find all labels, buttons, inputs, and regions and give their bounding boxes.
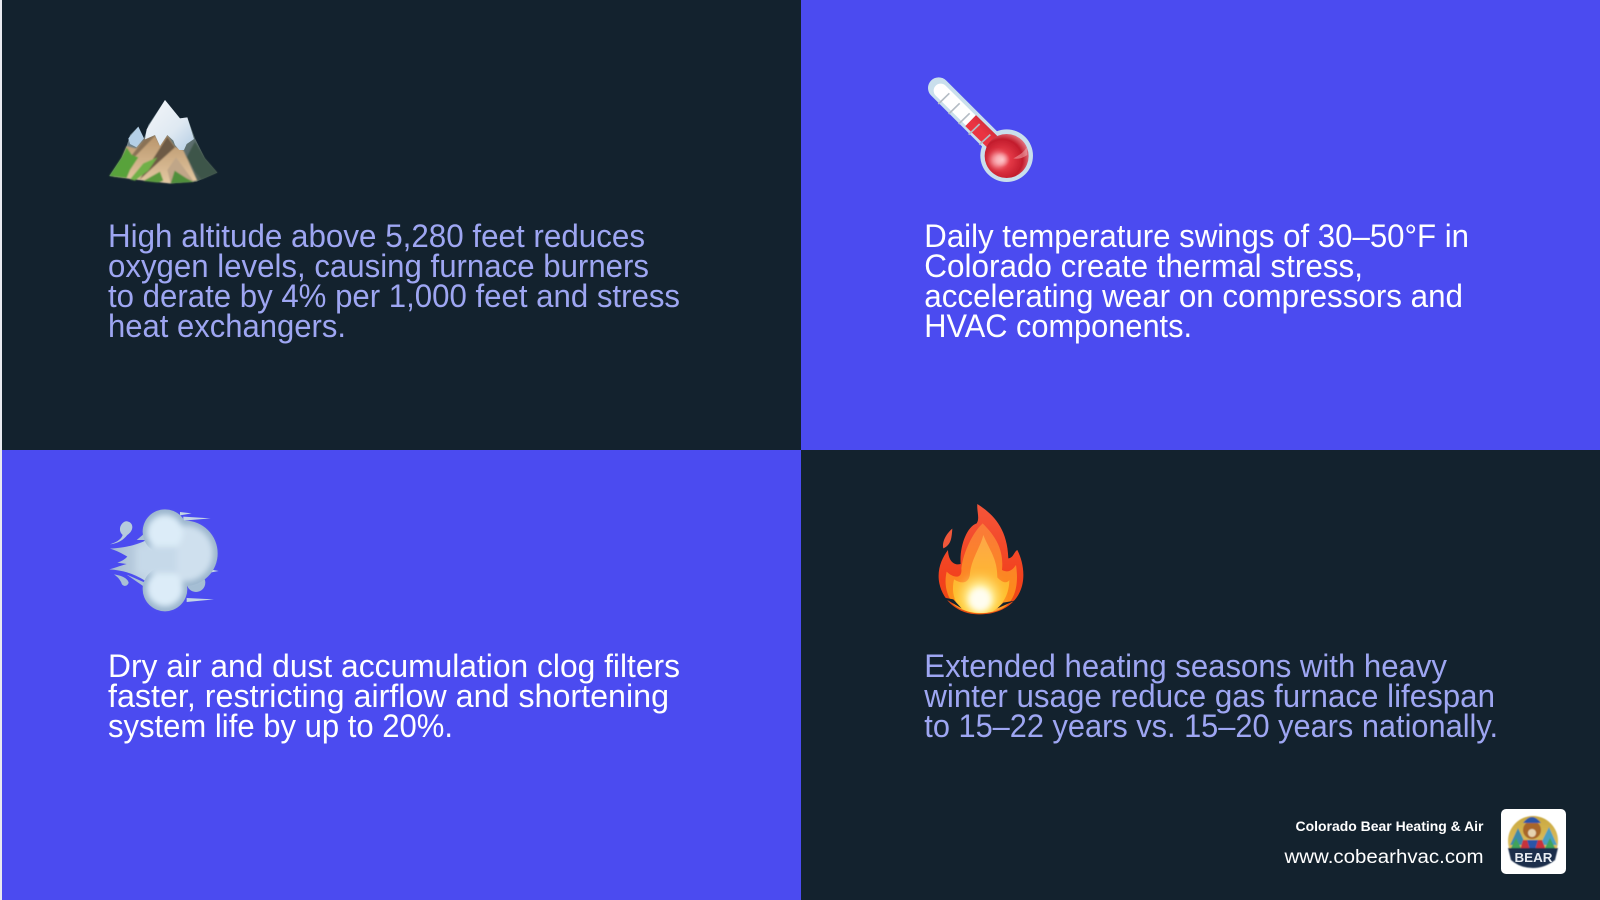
panel: high altitude — [2, 0, 801, 450]
brand name: Colorado Bear Heating & Air — [1296, 819, 1484, 834]
icon: snow-capped mountain — [109, 100, 217, 183]
footer: brand — [1283, 809, 1566, 874]
text: temperature swings — [924, 218, 1469, 344]
icon: flame — [939, 504, 1023, 615]
text: extended heating seasons: winter usage reduce gas furnace lifespan — [923, 678, 1495, 714]
logo: BEAR — [1514, 851, 1552, 865]
website: www.cobearhvac.com — [1283, 847, 1484, 868]
text: temperature swings: Colorado create thermal stress, — [924, 248, 1363, 284]
text: extended heating seasons: to 15–22 years vs. 15–20 years nationally. — [924, 708, 1498, 744]
text: high altitude: oxygen levels, causing furnace burners — [108, 248, 649, 284]
panel: temperature swings — [801, 0, 1600, 450]
icon: dust puff — [109, 509, 219, 611]
text: dry air and dust: faster, restricting airflow and shortening — [108, 678, 669, 714]
panel: dry air and dust — [2, 450, 801, 900]
panel: extended heating seasons — [801, 450, 1600, 900]
text: high altitude: heat exchangers. — [108, 308, 346, 344]
text: high altitude: to derate by 4% per 1,000 feet and stress — [108, 278, 680, 314]
text: dry air and dust: Dry air and dust accumulation clog filters — [108, 648, 680, 684]
icon: thermometer — [938, 88, 1033, 182]
text: dry air and dust — [108, 648, 680, 744]
text: high altitude — [108, 218, 680, 344]
logo — [1501, 809, 1566, 874]
puff body — [143, 509, 218, 611]
text: temperature swings: accelerating wear on compressors and — [924, 278, 1463, 314]
text: extended heating seasons: Extended heating seasons with heavy — [924, 648, 1447, 684]
text: temperature swings: HVAC components. — [924, 308, 1192, 344]
text: dry air and dust: system life by up to 20%. — [108, 708, 453, 744]
text: high altitude: High altitude above 5,280 feet reduces — [108, 218, 645, 254]
text: temperature swings: Daily temperature swings of 30–50°F in — [924, 218, 1469, 254]
text: extended heating seasons — [923, 648, 1498, 744]
